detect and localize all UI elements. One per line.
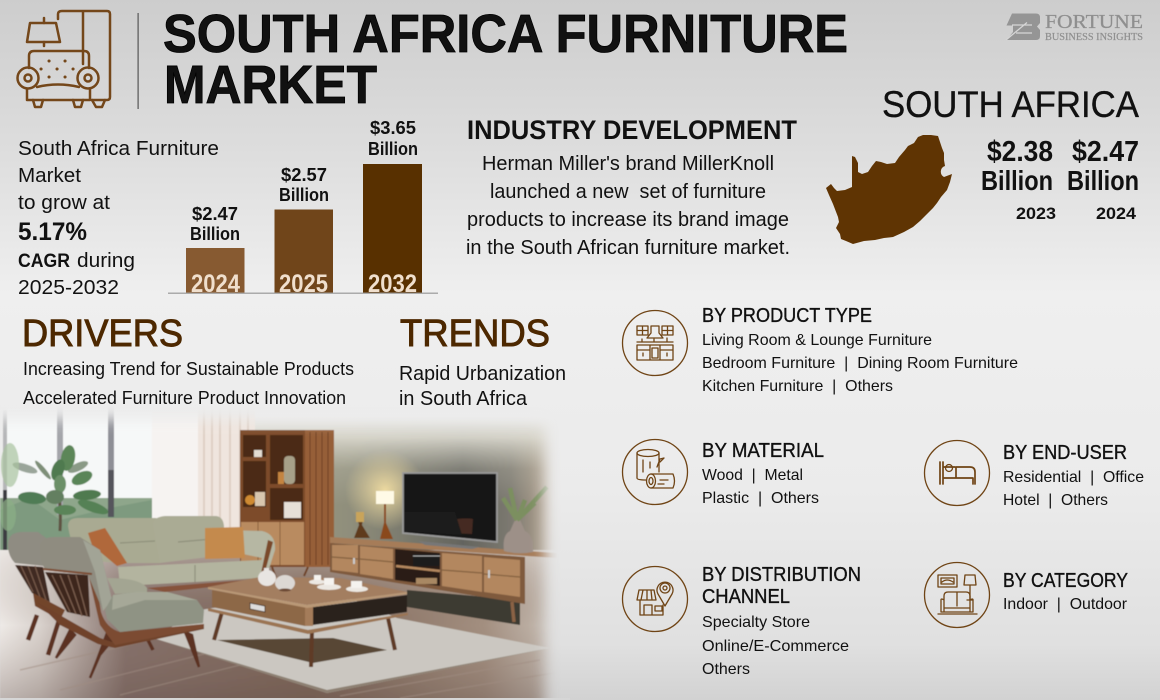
title (163, 4, 848, 115)
bar 2024: 2024 (191, 270, 240, 298)
image: living room scene (0, 410, 556, 698)
category: by category: BY CATEGORY (1003, 570, 1128, 592)
bottom edge (0, 698, 570, 700)
curtain (198, 422, 255, 528)
icon: kitchen (622, 310, 688, 376)
title: MARKET (164, 55, 377, 115)
logo: Fortune Business Insights (1006, 12, 1143, 43)
category: by material: Plastic | Others (702, 490, 819, 507)
category: by product type: Living Room & Lounge Furniture (702, 332, 932, 349)
tv unit (330, 537, 557, 558)
rug (156, 600, 546, 690)
bar 2025: Billion (279, 185, 329, 205)
icon: armchair, lamp and wardrobe (18, 11, 110, 107)
value 2024: 2024 (1096, 204, 1137, 223)
category: by distribution channel: Online/E-Commerce (702, 638, 849, 655)
value 2024: Billion (1067, 165, 1139, 196)
logo: Fortune Business Insights: BUSINESS INSIGHTS (1045, 32, 1143, 43)
panel: industry development: in the South African furniture market. (466, 237, 790, 259)
category: by product type: Kitchen Furniture | Others (702, 378, 893, 395)
vase and plant (504, 520, 533, 553)
panel: South Africa market values: SOUTH AFRICA (882, 84, 1139, 125)
bar 2025: $2.57 (281, 165, 327, 185)
category: by material: Wood | Metal (702, 467, 803, 484)
value 2023: Billion (981, 165, 1053, 196)
category: by end-user: BY END-USER (1003, 442, 1127, 464)
lamp (376, 491, 394, 504)
back chair (8, 532, 147, 655)
text: growth statement: during (77, 250, 135, 272)
category: by end-user: Hotel | Others (1003, 492, 1108, 509)
value 2023 (981, 136, 1056, 223)
text: growth statement: 2025-2032 (18, 277, 119, 299)
value 2023: $2.38 (987, 136, 1053, 168)
coffee table shadow (217, 638, 387, 663)
panel: industry development: launched a new set of furniture (490, 181, 766, 203)
value 2024: $2.47 (1072, 136, 1139, 168)
text: growth statement: to grow at (18, 192, 110, 214)
bar 2032: Billion (368, 139, 418, 159)
coffee table (208, 577, 408, 667)
category: by product type: BY PRODUCT TYPE (702, 305, 872, 327)
bar 2032 (363, 118, 422, 298)
category: by category (924, 562, 1128, 628)
panel: South Africa market values (826, 84, 1139, 244)
bar 2024: Billion (190, 224, 240, 244)
category: by distribution channel (622, 564, 861, 678)
text: growth statement: 5.17% (18, 218, 87, 246)
category: by distribution channel: BY DISTRIBUTION (702, 564, 861, 586)
title: SOUTH AFRICA FURNITURE (163, 4, 848, 64)
cabinet (240, 430, 306, 568)
panel: trends: TRENDS (400, 313, 550, 355)
panel: drivers (22, 313, 354, 408)
panel: trends (399, 313, 566, 410)
category: by end-user: Residential | Office (1003, 469, 1144, 486)
panel: industry development: products to increase its brand image (467, 209, 789, 231)
panel: drivers: DRIVERS (22, 313, 183, 355)
category: by product type (622, 305, 1018, 395)
panel: industry development: INDUSTRY DEVELOPMENT (467, 115, 797, 145)
category: by material: BY MATERIAL (702, 440, 824, 462)
text: growth statement: South Africa Furniture (18, 138, 219, 160)
panel: drivers: Increasing Trend for Sustainable Products (23, 359, 354, 379)
category: by category: Indoor | Outdoor (1003, 596, 1128, 613)
panel: drivers: Accelerated Furniture Product Innovation (23, 388, 346, 408)
map: South Africa (826, 135, 952, 244)
category: by end-user (924, 440, 1144, 509)
icon: wood logs (622, 440, 688, 504)
panel: industry development (466, 115, 797, 259)
bar chart: market size (168, 118, 438, 298)
bar 2032: 2032 (368, 270, 417, 298)
floor (0, 550, 570, 700)
value 2023: 2023 (1016, 204, 1056, 223)
bar 2032: $3.65 (370, 118, 416, 138)
divider (138, 13, 139, 109)
icon: sofa with picture and lamp (924, 562, 990, 628)
icon: store and location pin (622, 566, 688, 632)
bar 2024 (186, 204, 244, 298)
bar 2024: $2.47 (192, 204, 238, 224)
text: growth statement: CAGR (18, 251, 70, 272)
panel: industry development: Herman Miller's brand MillerKnoll (482, 153, 774, 175)
sofa (68, 516, 275, 592)
shadow under tv unit (407, 590, 520, 625)
category: by distribution channel: CHANNEL (702, 586, 790, 608)
bar 2025 (274, 165, 333, 298)
panel: trends: Rapid Urbanization (399, 363, 566, 385)
value 2024 (1067, 136, 1139, 223)
statue (354, 522, 370, 538)
tea set (258, 568, 368, 592)
text: growth statement (18, 138, 219, 299)
icon: bed (924, 440, 990, 506)
bar 2025: 2025 (279, 270, 328, 298)
text: growth statement: Market (18, 165, 81, 187)
category: by distribution channel: Specialty Store (702, 614, 810, 631)
category: by product type: Bedroom Furniture | Dining Room Furniture (702, 355, 1018, 372)
front chair (37, 537, 204, 678)
wall (333, 430, 554, 551)
panel: trends: in South Africa (399, 388, 528, 410)
logo: Fortune Business Insights: FORTUNE (1045, 12, 1143, 33)
window (0, 400, 198, 550)
category: by material (622, 440, 824, 507)
floor plant (0, 443, 110, 531)
category: by distribution channel: Others (702, 661, 750, 678)
tv (403, 473, 497, 542)
